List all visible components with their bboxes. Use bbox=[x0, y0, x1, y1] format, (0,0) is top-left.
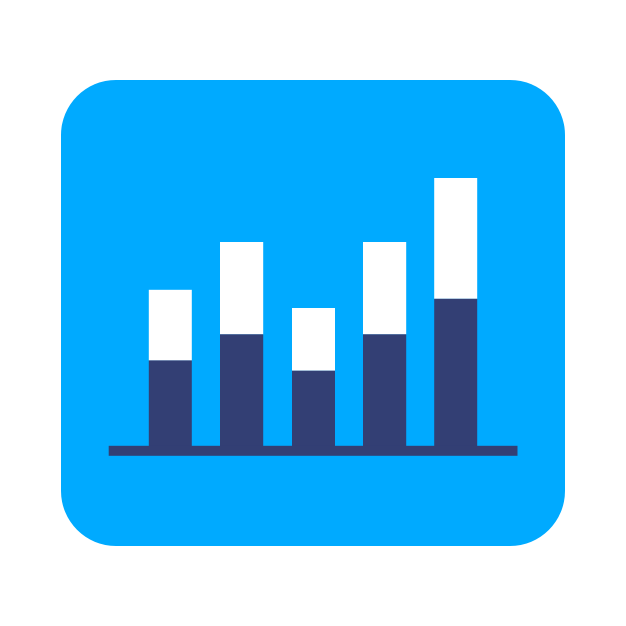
chart baseline bbox=[109, 446, 517, 456]
panel: blue rounded background bbox=[61, 80, 565, 546]
bar 5 bbox=[434, 178, 477, 447]
bar 4 bbox=[363, 242, 406, 446]
bar 2 bbox=[220, 242, 263, 446]
bar 3 bbox=[292, 308, 335, 447]
bar 1 bbox=[149, 290, 192, 446]
